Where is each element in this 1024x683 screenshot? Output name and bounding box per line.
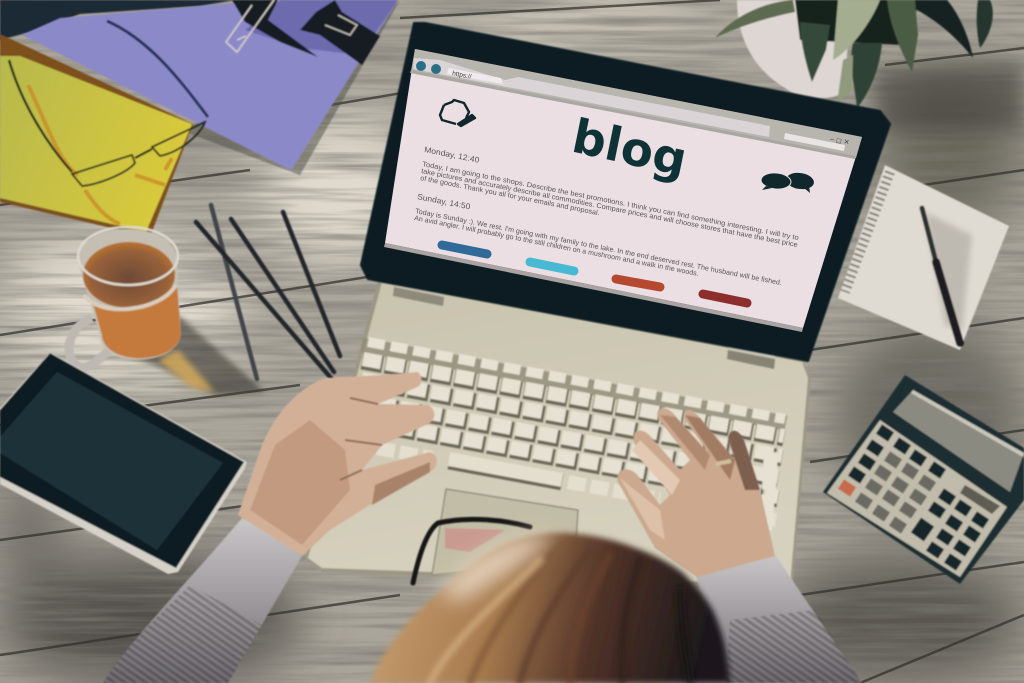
heading: blog: blog	[568, 109, 691, 188]
keyboard	[354, 342, 786, 530]
spiral notebook and pen	[838, 165, 1009, 350]
pen shadow	[925, 212, 972, 330]
laptop base	[305, 280, 811, 592]
icon: speech bubbles	[760, 171, 815, 193]
head with blond hair	[370, 533, 730, 683]
solar panel	[960, 485, 1000, 514]
calculator	[823, 375, 1024, 584]
purple paper folder	[22, 0, 400, 175]
browser nav icons	[416, 61, 426, 71]
blog post text	[414, 145, 799, 287]
shadow at top left corner	[0, 0, 235, 40]
wedding ring	[716, 461, 731, 464]
blog post text: An avid angler. I will probably go to the still children on a mushroom and a walk in the woods.	[414, 215, 699, 278]
notebook spiral	[845, 172, 890, 292]
icon: document and pencil	[440, 100, 475, 126]
blog post text: of the goods. Thank you all for your emails and proposal.	[420, 175, 600, 217]
right sleeve	[695, 554, 862, 683]
browser chrome: https://	[452, 70, 472, 81]
eyeglasses	[9, 60, 205, 186]
plant in white pot	[715, 0, 993, 108]
blog post text: take pictures and accurately describe all commodities. Compare prices and will choose stores that have the best price	[421, 168, 798, 249]
screen display	[385, 49, 862, 328]
pencils	[196, 205, 340, 379]
left hand typing	[238, 372, 437, 556]
blog post text: Today is Sunday :). We rest. I'm going with my family to the lake. In the end deserved rest. The husband will be fished.	[415, 208, 782, 287]
clear key	[841, 484, 853, 492]
blog post text: Monday, 12:40	[424, 145, 480, 165]
laptop screen bezel	[361, 23, 890, 361]
left sleeve	[103, 518, 302, 683]
blog post text: Sunday, 14:50	[417, 192, 472, 212]
shadow behind plant	[870, 60, 1024, 130]
blog post text: Today, I am going to the shops. Describe the best promotions. I think you can find something interesting. I will try to	[422, 161, 799, 242]
second temple of glasses	[107, 21, 208, 117]
right hand typing	[617, 408, 775, 577]
tablet	[0, 352, 247, 574]
plus key	[916, 525, 929, 534]
calculator keys	[851, 429, 986, 566]
coloured buttons	[442, 245, 747, 303]
address bar	[447, 68, 503, 84]
glass handle	[69, 318, 128, 368]
laptop	[305, 23, 890, 592]
glasses frame	[413, 519, 530, 583]
shadow of tea glass with golden streak	[127, 315, 265, 395]
hair streaks	[430, 545, 690, 683]
window controls: – ◻ ✕	[830, 136, 850, 147]
space bar row	[449, 461, 562, 482]
calculator display	[893, 390, 1024, 492]
laptop hinges	[393, 279, 776, 369]
yellow folder with glasses	[0, 34, 205, 237]
binder clips	[226, 0, 380, 65]
touchpad	[432, 489, 578, 575]
browser chrome	[410, 49, 862, 159]
pen	[922, 208, 960, 343]
glass of tea	[69, 227, 181, 368]
